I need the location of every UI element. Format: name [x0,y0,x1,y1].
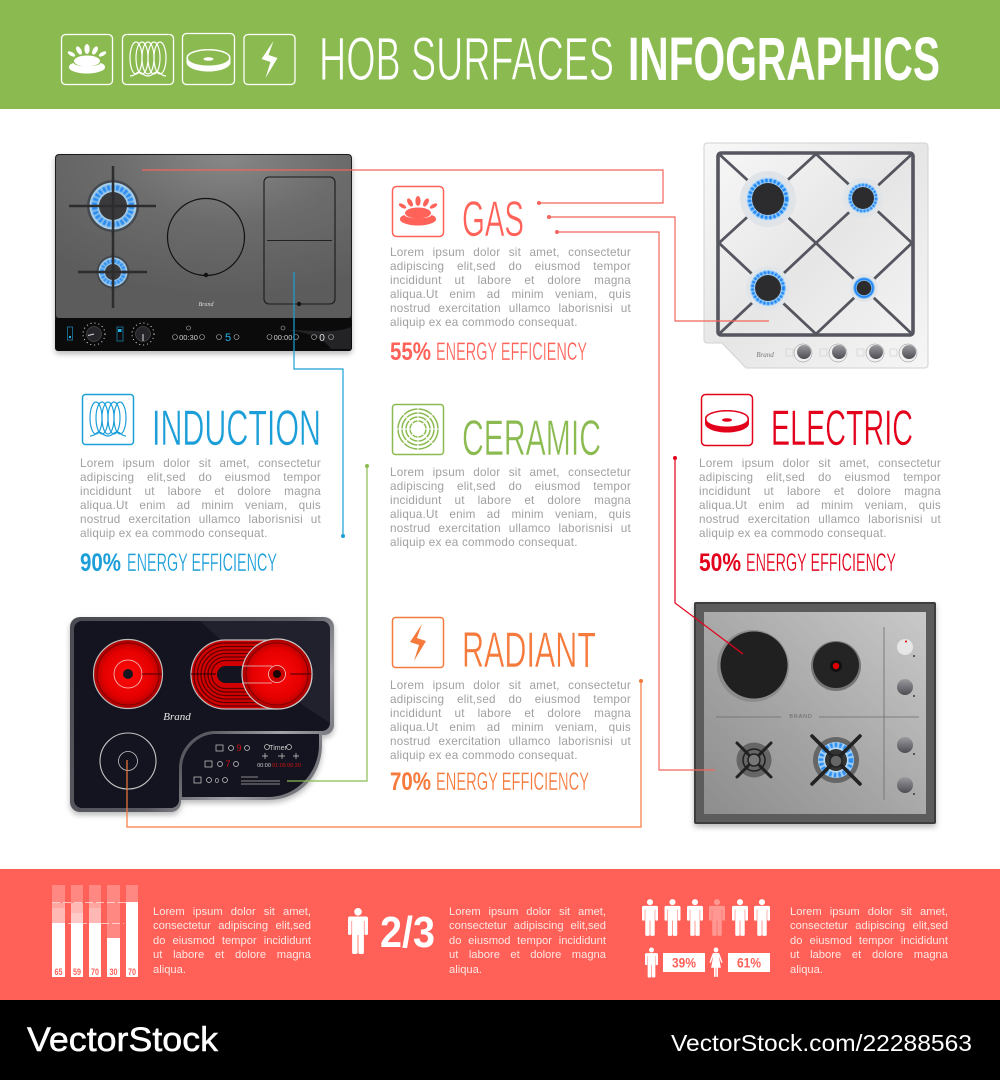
induction icon, heading and efficiency [80,394,321,577]
electric description: aliquip ex ea commodo consequat. [699,527,887,540]
divider lines and brand [716,627,919,800]
knobs [897,639,915,795]
touch controls: 7 [225,759,231,769]
footer text one: ut labore et dolore magna [153,949,311,961]
footer text two: do eiusmod tempor incididunt [449,935,606,947]
knobs [786,344,917,362]
footer text two [449,906,606,976]
radiant description [390,679,631,762]
gender split statistic [645,948,770,978]
small hot plate [811,641,861,691]
gender split statistic: 61% [737,954,761,970]
gas description: incididunt ut labore et dolore magna [390,274,631,287]
induction description: nostrud exercitation ullamco laborisnisi ut [80,513,321,526]
radiant icon, heading and efficiency: 70% [390,768,431,796]
ceramic icon and heading: CERAMIC [462,410,601,466]
watermark text [26,1021,972,1059]
induction description: adipiscing elit,sed do eiusmod tempor [80,471,321,484]
bar chart: 70 [91,967,99,977]
gas description: nostrud exercitation ullamco laborisnisi ut [390,302,631,315]
control displays: 0 [319,333,325,344]
control displays: 00:00 [274,333,292,342]
icon: lightning bolt [244,34,295,84]
right radiant zone [242,639,312,709]
induction description: incididunt ut labore et dolore magna [80,485,321,498]
footer text three: ut labore et dolore magna [790,949,948,961]
burner small [850,274,878,302]
title: HOB SURFACES [319,25,614,93]
radiant description: aliquip ex ea commodo consequat. [390,749,578,762]
icon: induction coil [122,34,174,84]
burner medium lower [746,266,790,310]
icon: gas burner [62,34,112,84]
gas burner large [69,166,156,308]
watermark text: VectorStock [27,1021,219,1059]
footer text two: consectetur adipiscing elit,sed [449,920,606,932]
induction description: aliquip ex ea commodo consequat. [80,527,268,540]
panel: radiant [390,616,631,796]
induction description: aliqua.Ut enim ad minim veniam, quis [80,499,321,512]
hob: white gas [704,142,928,368]
ceramic description: Lorem ipsum dolor sit amet, consectetur [390,466,631,479]
panel: ceramic [390,404,631,549]
footer text one: do eiusmod tempor incididunt [153,935,311,947]
brand mark: Brand [198,302,214,308]
oblong radiant zone [191,640,312,709]
footer text two: ut labore et dolore magna [449,949,606,961]
pan grate [718,153,913,335]
radiant icon, heading and efficiency: ENERGY EFFICIENCY [436,768,589,796]
flex zone [264,177,335,306]
watermark text: VectorStock.com/22288563 [671,1030,972,1056]
touch controls: 00:30 [287,763,301,769]
gas description [390,246,631,329]
bar chart: 70 [128,967,136,977]
brand mark: Brand [756,351,774,359]
gas description: adipiscing elit,sed do eiusmod tempor [390,260,631,273]
footer text two: aliqua. [449,964,482,976]
footer text three: consectetur adipiscing elit,sed [790,920,948,932]
hob: mixed gas and induction [52,154,356,358]
radiant description: nostrud exercitation ullamco laborisnisi ut [390,735,631,748]
control displays: 00:30 [179,333,198,342]
footer text three [790,906,948,976]
touch controls: 0 [215,778,219,785]
icon: electric plate [182,34,234,84]
gas description: Lorem ipsum dolor sit amet, consectetur [390,246,631,259]
electric icon, heading and efficiency: ENERGY EFFICIENCY [746,549,896,577]
ceramic description: aliquip ex ea commodo consequat. [390,536,578,549]
radiant description: aliqua.Ut enim ad minim veniam, quis [390,721,631,734]
footer text one: consectetur adipiscing elit,sed [153,920,311,932]
statistic: two thirds [348,908,435,957]
header band [0,0,1000,109]
induction icon, heading and efficiency: 90% [80,549,121,577]
control displays: 5 [225,332,231,344]
touch controls: 9 [236,743,242,753]
bar chart [52,885,138,977]
panel: electric [699,394,941,577]
electric description [699,457,941,540]
header icons [60,32,296,86]
ceramic description: nostrud exercitation ullamco laborisnisi ut [390,522,631,535]
control knobs [68,323,154,345]
footer text one: Lorem ipsum dolor sit amet, [153,906,311,918]
burner medium [843,178,883,218]
hob: radiant ceramic [66,616,338,818]
induction description [80,457,321,540]
radiant description: adipiscing elit,sed do eiusmod tempor [390,693,631,706]
people pictogram row [642,899,770,936]
panel: gas [390,186,631,366]
touch controls [194,743,301,785]
bar chart: 59 [73,967,81,977]
watermark bar [0,1000,1000,1080]
footer text three: Lorem ipsum dolor sit amet, [790,906,948,918]
large hot plate [717,630,789,702]
footer statistics band [0,869,1000,1000]
touch controls: Timer [269,745,287,752]
gas icon, heading and efficiency: GAS [462,191,524,247]
control displays [172,326,334,344]
gas burner off [736,742,772,778]
gas description: aliquip ex ea commodo consequat. [390,316,578,329]
gender split statistic: 39% [672,954,696,970]
panel: induction [80,394,321,577]
gas description: aliqua.Ut enim ad minim veniam, quis [390,288,631,301]
ceramic description: incididunt ut labore et dolore magna [390,494,631,507]
induction icon, heading and efficiency: INDUCTION [152,400,321,456]
touch controls: 00:00 [257,763,271,769]
footer text two: Lorem ipsum dolor sit amet, [449,906,606,918]
left radiant zone [94,640,162,708]
gas icon, heading and efficiency: 55% [390,338,431,366]
footer text three: do eiusmod tempor incididunt [790,935,948,947]
radiant icon, heading and efficiency: RADIANT [462,622,596,678]
footer text one: aliqua. [153,964,186,976]
gas icon, heading and efficiency [390,186,587,366]
electric description: nostrud exercitation ullamco laborisnisi ut [699,513,941,526]
gas icon, heading and efficiency: ENERGY EFFICIENCY [436,338,587,366]
gas burner on [812,736,860,784]
touch controls: 01:05 [272,763,286,769]
ceramic description: aliqua.Ut enim ad minim veniam, quis [390,508,631,521]
induction circle zone [168,198,244,277]
bar chart: 30 [110,967,118,977]
radiant icon, heading and efficiency [390,616,596,796]
electric description: aliqua.Ut enim ad minim veniam, quis [699,499,941,512]
electric icon, heading and efficiency: 50% [699,549,741,577]
electric description: incididunt ut labore et dolore magna [699,485,941,498]
induction icon, heading and efficiency: ENERGY EFFICIENCY [127,549,277,577]
induction description: Lorem ipsum dolor sit amet, consectetur [80,457,321,470]
ceramic description [390,466,631,549]
divider lines and brand: BRAND [789,714,813,720]
footer text three: aliqua. [790,964,823,976]
footer text one [153,906,311,976]
ceramic icon and heading [392,404,601,466]
statistic: two thirds: 2/3 [380,908,435,957]
gas burner small [95,254,131,290]
electric icon, heading and efficiency [699,394,913,577]
ceramic description: adipiscing elit,sed do eiusmod tempor [390,480,631,493]
burner large [740,171,796,227]
inactive zone [100,733,156,789]
radiant description: incididunt ut labore et dolore magna [390,707,631,720]
radiant description: Lorem ipsum dolor sit amet, consectetur [390,679,631,692]
brand mark: Brand [163,711,191,723]
electric description: Lorem ipsum dolor sit amet, consectetur [699,457,941,470]
bar chart: 65 [54,967,62,977]
electric description: adipiscing elit,sed do eiusmod tempor [699,471,941,484]
